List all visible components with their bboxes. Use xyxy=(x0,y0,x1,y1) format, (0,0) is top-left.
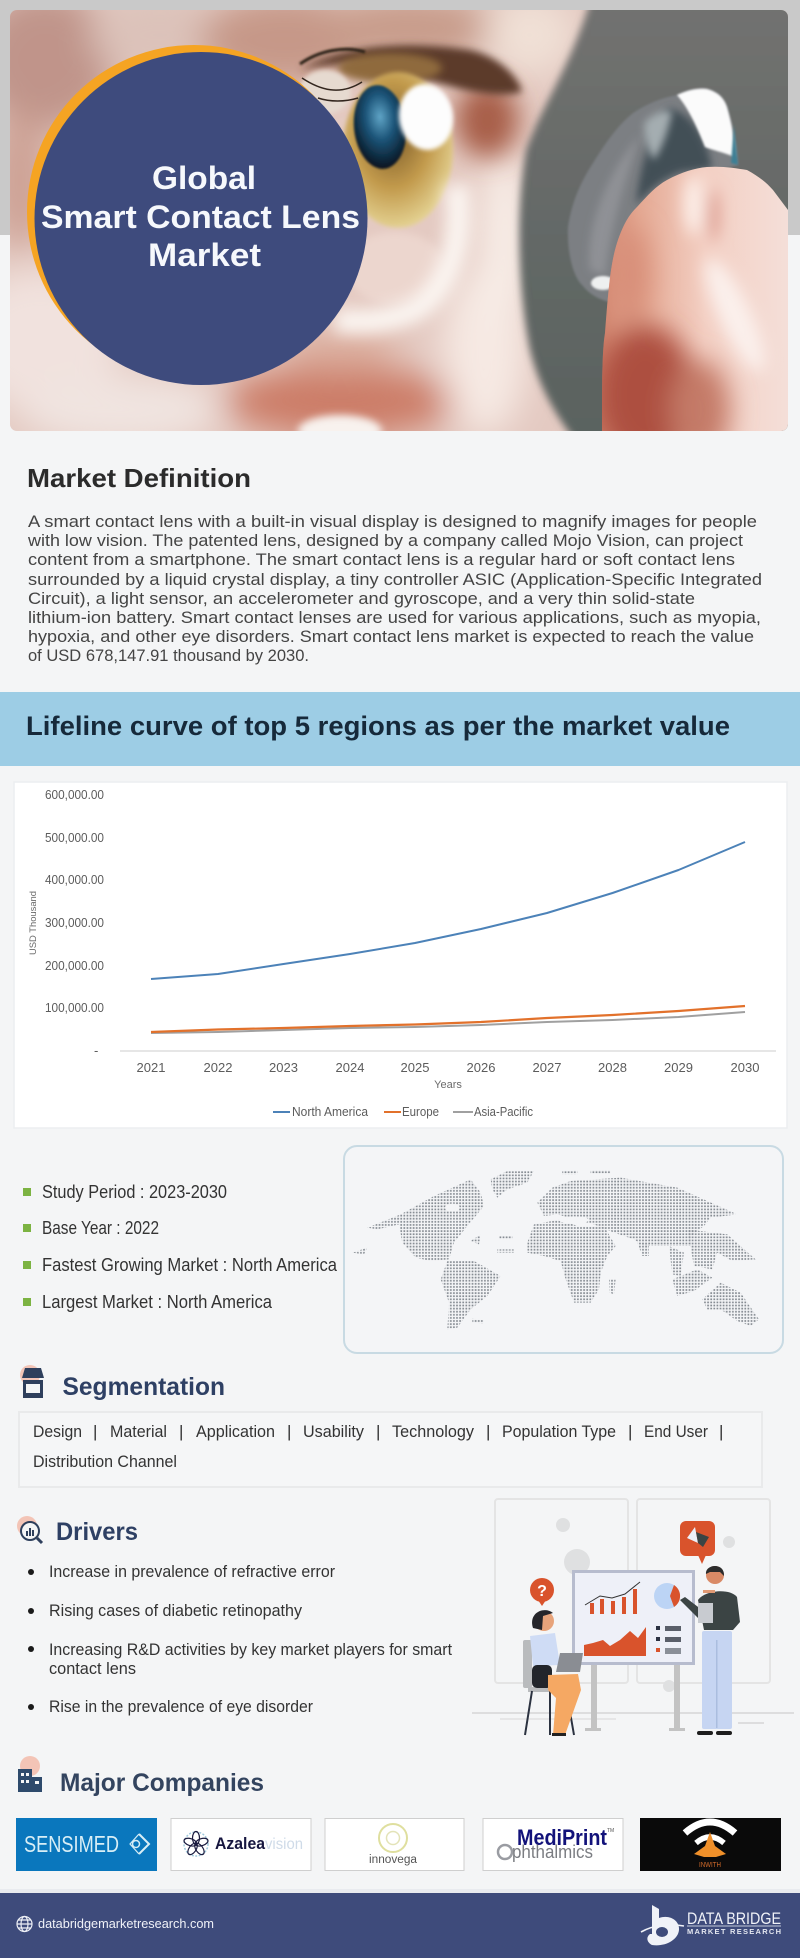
text block: market definition xyxy=(27,513,762,665)
series: North America xyxy=(151,842,745,979)
panel: segmentation categories: Technology xyxy=(392,1422,474,1441)
bar chart with trend line xyxy=(585,1582,640,1614)
section heading: Drivers xyxy=(17,1516,138,1546)
series: Asia-Pacific xyxy=(151,1012,745,1033)
panel: segmentation categories: | xyxy=(376,1422,380,1441)
board stand xyxy=(585,1663,685,1731)
question speech bubble: ? xyxy=(537,1583,547,1600)
section heading: Segmentation: Segmentation xyxy=(62,1373,225,1401)
text block: market definition: A smart contact lens with a built-in visual display is designed to magnify images for people xyxy=(28,513,757,531)
panel: line chart xyxy=(14,782,787,1128)
x axis labels: 2022 xyxy=(204,1060,232,1075)
y axis labels: - xyxy=(94,1043,98,1058)
list: market drivers: Increasing R&D activities by key market players for smart xyxy=(49,1641,452,1659)
panel: segmentation categories: | xyxy=(628,1422,632,1441)
key facts list xyxy=(23,1182,338,1312)
gray backdrop xyxy=(519,0,800,445)
x axis labels: 2030 xyxy=(731,1060,759,1075)
section heading: Segmentation xyxy=(20,1365,225,1401)
logo: Data Bridge xyxy=(641,1905,781,1945)
x axis labels: 2025 xyxy=(401,1060,429,1075)
hero photo: eye and contact lens on fingertip xyxy=(10,10,788,431)
text block: market definition: of USD 678,147.91 thousand by 2030. xyxy=(28,647,309,665)
x axis line xyxy=(120,1050,776,1052)
panel: dotted world map xyxy=(344,1146,783,1353)
banner: lifeline curve heading xyxy=(0,692,800,766)
icon: magnifier with chart xyxy=(17,1516,42,1543)
top gray band xyxy=(0,0,800,235)
logo: Innovega xyxy=(325,1818,464,1870)
logo: MediPrint Ophthalmics: phthalmics xyxy=(512,1842,593,1862)
panel: segmentation categories: Distribution Channel xyxy=(33,1452,177,1471)
icon: buildings xyxy=(18,1756,42,1792)
text block: market definition: Circuit), a light sensor, an accelerometer and gyroscope, and a very thin solid-state xyxy=(28,590,695,608)
panel: segmentation categories: Design xyxy=(33,1422,82,1441)
legend: North America xyxy=(292,1104,369,1119)
legend: Europe xyxy=(402,1104,439,1119)
text block: market definition: content from a smartphone. The smart contact lens is a regular hard or soft contact lens xyxy=(28,551,735,569)
woman seated with laptop xyxy=(523,1610,583,1736)
footer xyxy=(0,1889,800,1958)
x axis labels xyxy=(137,1060,759,1075)
navy title circle xyxy=(34,52,368,385)
panel: segmentation categories: | xyxy=(287,1422,291,1441)
logo: Sensimed xyxy=(16,1818,157,1871)
text block: market definition: hypoxia, and other eye disorders. Smart contact lens market is expected to reach the value xyxy=(28,628,754,646)
title: Global xyxy=(152,160,256,196)
logo: Azalea Vision xyxy=(171,1818,311,1870)
panel: segmentation categories: Material xyxy=(110,1422,167,1441)
map dots xyxy=(352,1170,759,1329)
list: market drivers: Increase in prevalence of refractive error xyxy=(49,1563,335,1581)
y axis labels: 300,000.00 xyxy=(45,915,104,930)
presentation board xyxy=(574,1572,694,1664)
text block: market definition: surrounded by a liquid crystal display, a tiny controller ASIC (Application-Specific Integrated xyxy=(28,571,762,589)
panel: segmentation categories: | xyxy=(719,1422,723,1441)
icon: globe xyxy=(17,1916,32,1932)
panel: segmentation categories: Application xyxy=(196,1422,275,1441)
panel: segmentation categories xyxy=(19,1412,762,1487)
title: Market xyxy=(148,237,261,273)
panel: segmentation categories: Usability xyxy=(303,1422,364,1441)
y axis labels xyxy=(45,787,104,1058)
website: databridgemarketresearch.com xyxy=(38,1916,214,1931)
eye xyxy=(299,45,522,322)
y axis title: USD Thousand xyxy=(28,891,39,955)
key facts list: Base Year : 2022 xyxy=(42,1218,159,1238)
key facts list: Fastest Growing Market : North America xyxy=(42,1255,338,1275)
x axis title: Years xyxy=(434,1079,462,1091)
logo: Data Bridge: DATA BRIDGE xyxy=(687,1909,781,1928)
y axis labels: 600,000.00 xyxy=(45,787,104,802)
logo: Innovega: innovega xyxy=(369,1854,418,1866)
orange accent circle xyxy=(27,45,361,379)
logo: MediPrint Ophthalmics: MediPrint xyxy=(517,1825,608,1850)
y axis labels: 200,000.00 xyxy=(45,958,104,973)
legend xyxy=(273,1104,533,1119)
key facts list: Study Period : 2023-2030 xyxy=(42,1182,227,1202)
wall panels and floor xyxy=(472,1499,794,1723)
eye socket shadow xyxy=(455,82,519,158)
y axis labels: 500,000.00 xyxy=(45,830,104,845)
megaphone speech bubble xyxy=(680,1521,715,1564)
fingertip xyxy=(602,166,788,431)
illustration: presenter and analyst at chart board xyxy=(472,1499,794,1736)
key facts list: Largest Market : North America xyxy=(42,1292,273,1312)
skin tones xyxy=(0,0,575,445)
y axis labels: 400,000.00 xyxy=(45,872,104,887)
y axis labels: 100,000.00 xyxy=(45,1000,104,1015)
section heading: Major Companies: Major Companies xyxy=(60,1769,264,1797)
legend: Asia-Pacific xyxy=(474,1104,533,1119)
panel: segmentation categories: End User xyxy=(644,1422,708,1441)
x axis labels: 2028 xyxy=(598,1060,627,1075)
logo: Data Bridge: MARKET RESEARCH xyxy=(687,1927,781,1936)
panel: segmentation categories: Population Type xyxy=(502,1422,616,1441)
contact lens xyxy=(568,89,738,302)
x axis labels: 2024 xyxy=(336,1060,364,1075)
background circles xyxy=(556,1518,735,1692)
logo: Azalea Vision: vision xyxy=(265,1836,303,1853)
panel: segmentation categories: | xyxy=(93,1422,97,1441)
banner: lifeline curve heading: Lifeline curve of top 5 regions as per the market value xyxy=(26,711,730,741)
x axis labels: 2027 xyxy=(533,1060,561,1075)
area chart xyxy=(584,1627,646,1656)
x axis labels: 2021 xyxy=(137,1060,165,1075)
x axis labels: 2029 xyxy=(664,1060,693,1075)
logo: MediPrint Ophthalmics: TM xyxy=(607,1828,614,1834)
title xyxy=(41,160,360,273)
chart legend xyxy=(656,1626,681,1654)
list: market drivers: Rise in the prevalence of eye disorder xyxy=(49,1698,313,1716)
section heading: Drivers: Drivers xyxy=(56,1518,138,1546)
logo: MediPrint Ophthalmics xyxy=(483,1818,623,1870)
x axis labels: 2023 xyxy=(269,1060,298,1075)
title: Smart Contact Lens xyxy=(41,199,360,235)
x axis labels: 2026 xyxy=(467,1060,495,1075)
logo: Sensimed: SENSIMED xyxy=(24,1831,119,1857)
list: market drivers: Rising cases of diabetic retinopathy xyxy=(49,1602,303,1620)
logo: Inwith: INWITH xyxy=(699,1862,721,1869)
section heading: Major Companies xyxy=(18,1756,264,1797)
white blob at bottom of nose xyxy=(294,410,386,431)
list: market drivers: contact lens xyxy=(49,1660,136,1678)
text block: market definition: lithium-ion battery. Smart contact lenses are used for various applications, such as myopia, xyxy=(28,609,761,627)
question speech bubble xyxy=(530,1578,554,1606)
list: market drivers xyxy=(28,1563,452,1716)
logo: Inwith xyxy=(640,1818,781,1871)
series: Europe xyxy=(151,1006,745,1032)
logo: Azalea Vision: Azalea xyxy=(215,1834,265,1853)
pie chart xyxy=(654,1583,680,1609)
man presenting xyxy=(680,1566,740,1735)
icon: store xyxy=(20,1365,44,1398)
heading: Market Definition: Market Definition xyxy=(27,463,251,493)
panel: segmentation categories: | xyxy=(179,1422,183,1441)
panel: segmentation categories: | xyxy=(486,1422,490,1441)
text block: market definition: with low vision. The patented lens, designed by a company called Mojo Vision, can project xyxy=(27,532,743,550)
